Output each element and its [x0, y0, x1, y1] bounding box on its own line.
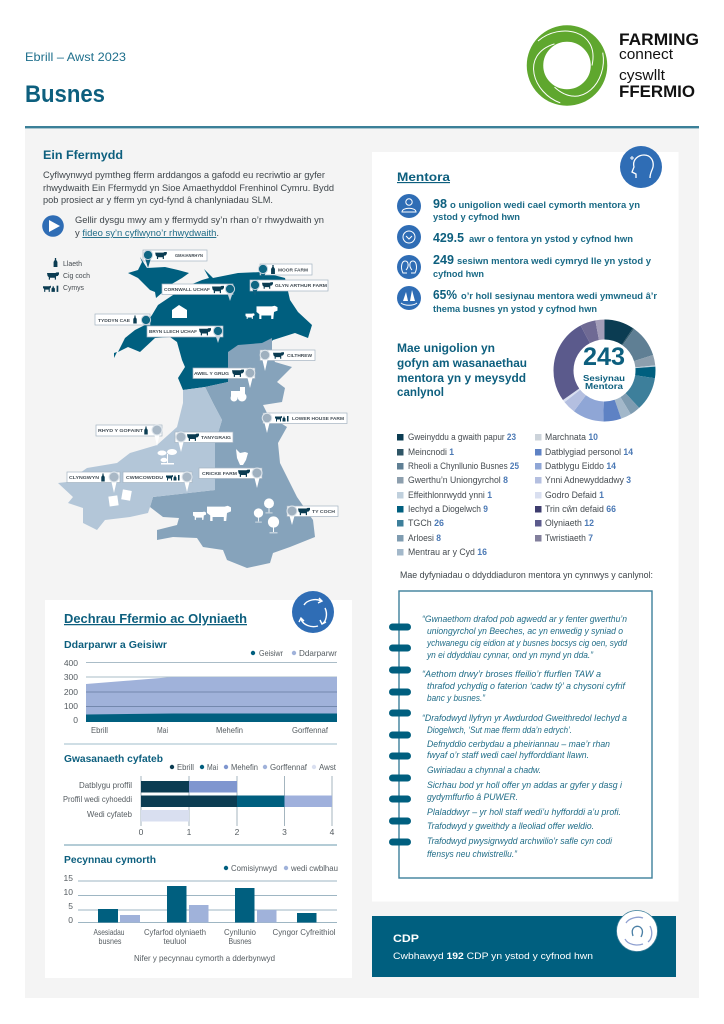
legend: mentoring topics: Trin cŵn defaid 66	[545, 504, 616, 514]
bar chart: Pecynnau cymorth: 10	[64, 887, 73, 897]
logo: Farming Connect: FARMING	[619, 31, 699, 49]
bar chart: Pecynnau cymorth: Pecynnau cymorth	[64, 855, 156, 866]
logo: Farming Connect: FFERMIO	[619, 83, 695, 101]
legend: mentoring topics	[397, 432, 633, 557]
video link text: Gellir dysgu mwy am y ffermydd sy’n rhan o’r rhwydwaith yn	[75, 215, 324, 226]
legend: mentoring topics: Gweinyddu a gwaith papur 23	[408, 432, 516, 442]
heading: Dechrau Ffermio: Dechrau Ffermio ac Olyniaeth	[64, 612, 247, 626]
quote text: banc y busnes.”	[427, 693, 486, 703]
icon: CDP cycle	[616, 910, 658, 952]
area chart: Ddarparwr a Geisiwr: 100	[64, 701, 78, 711]
stat: 429.5 hours: awr o fentora yn ystod y cyfnod hwn	[469, 234, 633, 245]
bar chart: Gwasanaeth cyfateb: Ebrill	[177, 762, 194, 772]
heading: Ein Ffermydd: Ein Ffermydd	[43, 150, 123, 162]
panel: Dechrau Ffermio ac Olyniaeth	[45, 591, 352, 978]
map region: west	[58, 387, 222, 530]
quote text: Plaladdwyr – yr holl staff wedi’u hyfforddi a’u profi.	[427, 807, 621, 817]
legend: mentoring topics: Meincnodi 1	[408, 447, 454, 457]
page title: Busnes	[25, 81, 105, 108]
map of Wales	[43, 250, 347, 568]
bar chart: Gwasanaeth cyfateb: Mehefin	[231, 762, 258, 772]
icon: video play	[42, 215, 64, 237]
stat: 65% business theme	[397, 286, 657, 315]
stat: 65% business theme: o’r holl sesiynau mentora wedi ymwneud â’r	[461, 291, 657, 302]
bar chart: Pecynnau cymorth: Cyfarfod olyniaeth	[144, 927, 206, 937]
panel: Mentora	[372, 146, 678, 902]
bar chart: Gwasanaeth cyfateb: 1	[187, 827, 192, 837]
farm label: Cwmcowddu	[123, 472, 192, 492]
area chart: Ddarparwr a Geisiwr: 0	[73, 715, 78, 725]
icon: succession cycle	[292, 591, 334, 633]
stat: 429.5 hours: 429.5	[433, 230, 464, 245]
legend: mentoring topics: Rheoli a Chynllunio Busnes 25	[408, 461, 519, 471]
heading: mentoring areas: mentora yn y meysydd	[397, 371, 526, 385]
farm label: Cornwall Uchaf: CORNWALL UCHAF	[164, 287, 210, 292]
stat: 429.5 hours	[397, 225, 633, 249]
farm label: Tanygraig	[175, 432, 233, 452]
panel: CDP: CDP	[393, 933, 419, 945]
bar chart: Pecynnau cymorth: Asesiadau	[94, 927, 125, 937]
farm label: Moor Farm	[258, 264, 312, 279]
farm label: Bryn Llech Uchaf: BRYN LLECH UCHAF	[149, 329, 197, 334]
bar chart: Gwasanaeth cyfateb: 0	[139, 827, 144, 837]
map legend	[43, 258, 90, 292]
farm label: Moor Farm: MOOR FARM	[278, 268, 308, 272]
quote text	[422, 614, 628, 859]
panel: CDP	[372, 910, 676, 977]
farm label: Tanygraig: TANYGRAIG	[201, 435, 231, 440]
bar chart: Gwasanaeth cyfateb: Gwasanaeth cyfateb	[64, 754, 163, 765]
quote text: Gwiriadau a chynnal a chadw.	[427, 765, 541, 775]
legend: mentoring topics: Datblygiad personol 14	[545, 447, 633, 457]
quote text: fwyaf o’r staff wedi cael hyfforddiant llawn.	[427, 750, 589, 760]
bar chart: Gwasanaeth cyfateb: 4	[330, 827, 335, 837]
stat: 98 individuals	[397, 194, 640, 223]
bar chart: Pecynnau cymorth: Busnes	[228, 936, 252, 946]
area chart: Ddarparwr a Geisiwr: Geisiwr	[259, 648, 283, 658]
area chart: Ddarparwr a Geisiwr: Ddarparwr a Geisiwr	[64, 640, 167, 651]
bar chart: Gwasanaeth cyfateb: Datblygu proffil	[79, 780, 132, 790]
icon: plant	[158, 449, 177, 464]
farm label: Cricke Farm	[199, 468, 262, 488]
farm label: Rhyd y Gofaint: RHYD Y GOFAINT	[98, 428, 143, 433]
legend: mentoring topics: Datblygu Eiddo 14	[545, 461, 616, 471]
legend: mentoring topics: TGCh 26	[408, 518, 444, 528]
area chart: Ddarparwr a Geisiwr: Ebrill	[91, 725, 108, 735]
legend: mentoring topics: Gwerthu’n Uniongyrchol 8	[408, 475, 508, 485]
donut chart: 243 sessions: Sesiynau	[583, 374, 625, 383]
bar chart: Pecynnau cymorth: wedi cwblhau	[290, 863, 338, 873]
farm label: Bryn Llech Uchaf	[147, 326, 223, 343]
farm label: Gmaianrhyn: GMAIANRHYN	[175, 253, 204, 258]
legend: mentoring topics: Iechyd a Diogelwch 9	[408, 504, 488, 514]
area chart: Ddarparwr a Geisiwr: 300	[64, 672, 78, 682]
logo: Farming Connect: cyswllt	[619, 67, 666, 84]
panel: CDP: Cwbhawyd 192 CDP yn ystod y cyfnod hwn	[393, 951, 593, 961]
video link text	[75, 215, 324, 239]
panel: Ein Ffermydd	[42, 150, 347, 568]
quote text: “Aethom drwy’r broses ffeilio’r ffurflen TAW a	[422, 669, 601, 679]
icon: cow and sheep north	[246, 306, 278, 319]
donut chart: 243 sessions: Mentora	[585, 382, 624, 391]
bar chart: Pecynnau cymorth: 5	[68, 901, 73, 911]
heading: mentoring areas: Mae unigolion yn	[397, 341, 495, 355]
notebook of quotes	[389, 591, 652, 878]
quote text: uniongyrchol yn Beeches, ac yn enwedig y syniad o	[427, 626, 623, 636]
bar chart: Pecynnau cymorth	[64, 855, 338, 963]
area chart: Ddarparwr a Geisiwr: Gorffennaf	[292, 725, 329, 735]
farm label: Ty Coch	[287, 506, 338, 525]
intro text: pob prosiect ar y fferm yn cyd-fynd â chanlyniadau SLM.	[43, 195, 273, 206]
farm label: Gmaianrhyn	[143, 250, 207, 268]
bar chart: Pecynnau cymorth: busnes	[98, 936, 122, 946]
area chart: Ddarparwr a Geisiwr: Ddarparwr	[299, 648, 337, 658]
map region: north	[114, 257, 312, 390]
bar chart: Gwasanaeth cyfateb: Wedi cyfateb	[87, 809, 132, 819]
legend: mentoring topics: Arloesi 8	[408, 533, 441, 543]
farm label: Lower House Farm: LOWER HOUSE FARM	[292, 416, 344, 421]
farm label: Clyngwyn	[67, 472, 120, 493]
stat: 249 sessions	[397, 252, 652, 280]
farm label: Cilthrew: CILTHREW	[287, 353, 313, 358]
quote text: ychwanegu cig eidion at y busnes bocsys cig oen, sydd	[426, 638, 628, 648]
bar chart: Pecynnau cymorth: 0	[68, 915, 73, 925]
bar chart: Pecynnau cymorth: teuluol	[164, 936, 187, 946]
stat: 249 sessions: 249	[433, 252, 454, 267]
legend: mentoring topics: Ynni Adnewyddadwy 3	[545, 475, 631, 485]
farm label: Cricke Farm: CRICKE FARM	[202, 471, 237, 476]
legend: mentoring topics: Marchnata 10	[545, 432, 598, 442]
farm label: Ty Coch: TY COCH	[312, 509, 336, 514]
icon: trees	[254, 498, 279, 533]
intro text: Cyflwynwyd pymtheg fferm arddangos a gafodd eu recriwtio ar gyfer	[43, 170, 325, 181]
bar chart: Gwasanaeth cyfateb: Gorffennaf	[270, 762, 308, 772]
quote text: ffensys neu chwistrellu.”	[427, 849, 518, 859]
intro text: rhwydwaith Ein Ffermydd yn Sioe Amaethyddol Frenhinol Cymru. Bydd	[43, 183, 334, 194]
bar chart: Gwasanaeth cyfateb: 3	[282, 827, 287, 837]
map legend: Llaeth	[63, 259, 82, 268]
icon: barn	[172, 305, 187, 318]
legend: mentoring topics: Mentrau ar y Cyd 16	[408, 547, 487, 557]
farm label: Tyddyn Cae	[95, 314, 151, 325]
heading: Mentora: Mentora	[397, 172, 451, 184]
quote text: gydymffurfio â PUWER.	[427, 792, 518, 802]
stat: 98 individuals: o unigolion wedi cael cymorth mentora yn	[450, 200, 640, 211]
area chart: Ddarparwr a Geisiwr	[64, 640, 337, 735]
logo: Farming Connect	[524, 31, 699, 108]
stat: 65% business theme: thema busnes yn ystod y cyfnod hwn	[433, 304, 597, 315]
video link text: y fideo sy’n cyflwyno’r rhwydwaith.	[75, 228, 219, 239]
stat: 65% business theme: 65%	[433, 287, 457, 302]
stat: 249 sessions: sesiwn mentora wedi cymryd lle yn ystod y	[457, 256, 652, 267]
farm label: Lower House Farm	[262, 413, 347, 433]
header rule	[25, 126, 699, 128]
legend: mentoring topics: Godro Defaid 1	[545, 490, 604, 500]
map legend: Cymys	[63, 283, 84, 292]
bar chart: Gwasanaeth cyfateb: Proffil wedi cyhoeddi	[63, 794, 132, 804]
bar chart: Pecynnau cymorth: 15	[64, 873, 73, 883]
quote text: Defnyddio cerbydau a pheiriannau – mae’r rhan	[427, 739, 610, 749]
quote text: Trafodwyd y gweithdy a lleoliad offer weldio.	[427, 821, 594, 831]
logo: Farming Connect: connect	[619, 46, 674, 63]
donut chart: 243 sessions: 243	[583, 343, 625, 371]
farm label: Cornwall Uchaf	[162, 284, 235, 301]
icon: documents	[108, 489, 132, 507]
quote text: “Gwnaethom drafod pob agwedd ar y fenter gwerthu’n	[422, 614, 627, 624]
bar chart: Pecynnau cymorth: Nifer y pecynnau cymorth a dderbynwyd	[134, 953, 275, 963]
area chart: Ddarparwr a Geisiwr: 400	[64, 658, 78, 668]
bar chart: Gwasanaeth cyfateb: Mai	[207, 762, 218, 772]
bar chart: Gwasanaeth cyfateb: Awst	[319, 762, 337, 772]
heading: mentoring areas: gofyn am wasanaethau	[397, 356, 527, 370]
map legend: Cig coch	[63, 271, 90, 280]
map region: mid and south-east	[150, 338, 315, 568]
quote text: Trafodwyd pwysigrwydd archwilio’r safle cyn codi	[427, 836, 613, 846]
quote text: yn ei ddyddiau cynnar, ond yn mynd yn dda.”	[426, 650, 594, 660]
farm label: Clyngwyn: CLYNGWYN	[69, 475, 100, 480]
notebook rings	[389, 624, 411, 846]
stat: 249 sessions: cyfnod hwn	[433, 269, 484, 280]
farm label: Glyn Arthur Farm: GLYN ARTHUR FARM	[275, 283, 327, 288]
text: quotes intro: Mae dyfyniadau o ddyddiaduron mentora yn cynnwys y canlynol:	[400, 570, 653, 581]
farm label: Awel y Grug	[193, 368, 255, 388]
icon: rooster	[236, 449, 248, 465]
donut chart: 243 sessions	[564, 330, 646, 412]
stat: 98 individuals: 98	[433, 196, 447, 211]
farm label: Tyddyn Cae: TYDDYN CAE	[98, 318, 130, 323]
farm label: Cilthrew	[260, 350, 315, 371]
legend: mentoring topics: Effeithlonrwydd ynni 1	[408, 490, 492, 500]
legend: mentoring topics: Twristiaeth 7	[545, 533, 593, 543]
farm label: Rhyd y Gofaint	[96, 425, 162, 446]
date line: Ebrill – Awst 2023	[25, 50, 126, 64]
farm label: Cwmcowddu: CWMCOWDDU	[126, 475, 164, 480]
legend: mentoring topics: Olyniaeth 12	[545, 518, 594, 528]
quote text: Diogelwch, ‘Sut mae fferm dda’n edrych’.	[427, 725, 572, 735]
bar chart: Gwasanaeth cyfateb: 2	[235, 827, 240, 837]
icon: head	[620, 146, 662, 188]
bar chart: Gwasanaeth cyfateb	[63, 754, 337, 837]
quote text: thrafod ychydig o faterion ‘cadw tŷ’ a chysoni cyfrif	[427, 681, 626, 691]
quote text: “Drafodwyd llyfryn yr Awdurdod Gweithredol Iechyd a	[422, 713, 627, 723]
farm label: Glyn Arthur Farm	[250, 280, 328, 296]
area chart: Ddarparwr a Geisiwr: Mehefin	[216, 725, 243, 735]
area chart: Ddarparwr a Geisiwr: Mai	[157, 725, 168, 735]
icon: cow and sheep south	[193, 506, 231, 521]
farm label: Awel y Grug: AWEL Y GRUG	[194, 371, 229, 376]
heading: mentoring areas: canlynol	[397, 385, 444, 399]
stat: 98 individuals: ystod y cyfnod hwn	[433, 212, 520, 223]
icon: green swirl ring	[524, 31, 611, 108]
bar chart: Pecynnau cymorth: Comisiynwyd	[231, 863, 277, 873]
heading: mentoring areas	[397, 341, 527, 399]
icon: tractor	[230, 387, 246, 402]
area chart: Ddarparwr a Geisiwr: 200	[64, 687, 78, 697]
intro text	[43, 170, 334, 206]
bar chart: Pecynnau cymorth: Cyngor Cyfreithiol	[272, 927, 336, 937]
bar chart: Pecynnau cymorth: Cynllunio	[224, 927, 256, 937]
quote text: Sicrhau bod yr holl offer yn addas ar gyfer y dasg i	[427, 780, 623, 790]
page background panel	[25, 128, 699, 998]
